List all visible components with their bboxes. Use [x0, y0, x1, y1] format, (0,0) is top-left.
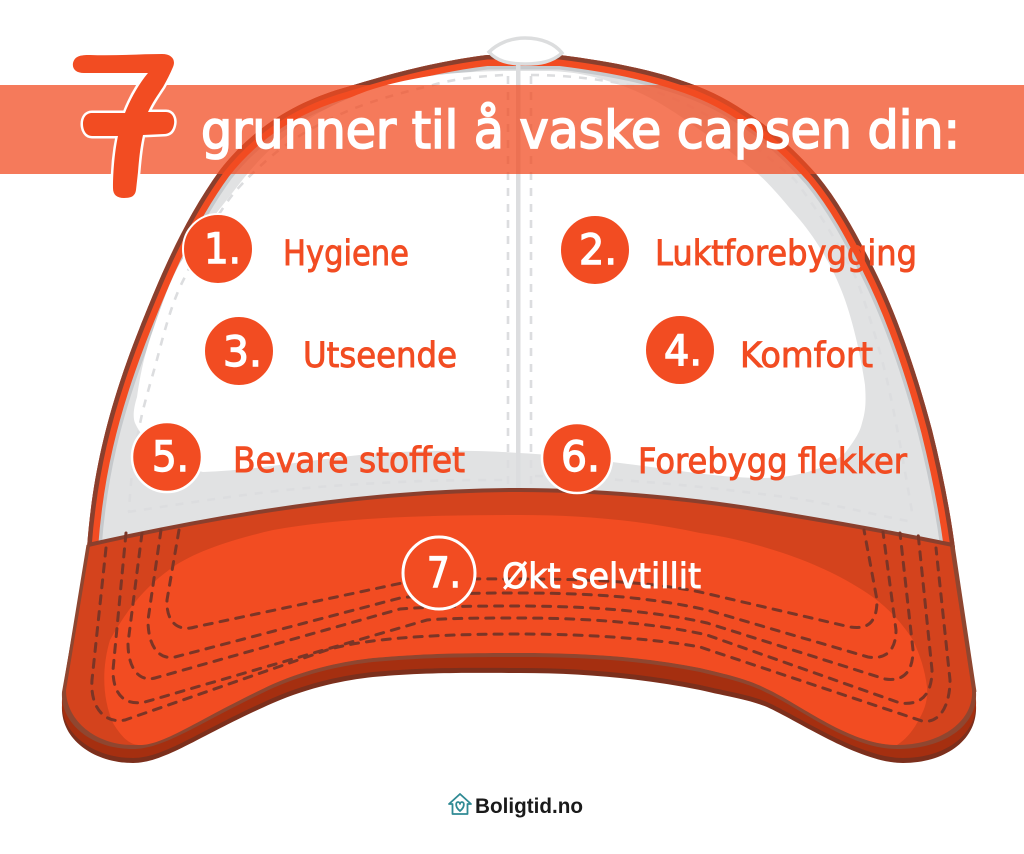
- cap visor: [62, 490, 976, 763]
- reason 6: [542, 423, 908, 493]
- reason 4: Komfort: [740, 336, 873, 376]
- reason 2: [560, 215, 917, 285]
- title: grunner til å vaske capsen din:: [201, 101, 960, 161]
- reason 6: 6.: [561, 432, 600, 481]
- cap crown: [60, 38, 980, 560]
- reason 5: Bevare stoffet: [233, 441, 465, 481]
- visor bright area: [104, 515, 927, 745]
- logo: Boligtid.no: [475, 795, 583, 818]
- reason 6: Forebygg flekker: [638, 442, 908, 482]
- visor face: [66, 490, 972, 745]
- top button: [489, 38, 562, 64]
- reason 3: Utseende: [303, 336, 457, 376]
- reason 3: 3.: [223, 327, 262, 376]
- reason 1: Hygiene: [283, 234, 409, 274]
- reason 4: [645, 315, 873, 385]
- reason 5: [132, 422, 465, 492]
- reason 4: 4.: [664, 326, 702, 375]
- visor side edges: [64, 545, 975, 692]
- centre seam: [516, 62, 520, 492]
- reason 1: [183, 214, 409, 284]
- visor underside: [62, 490, 976, 763]
- visor stitching: [92, 530, 950, 721]
- reason 7: 7.: [427, 548, 461, 597]
- cap illustration: [60, 38, 980, 763]
- reason 2: Luktforebygging: [655, 234, 917, 274]
- reason 7: [403, 537, 701, 609]
- title banner: [0, 85, 1024, 174]
- reason 7: Økt selvtillit: [502, 557, 701, 597]
- icon: house with heart: [449, 794, 471, 814]
- big number seven: [73, 54, 174, 198]
- reason 3: [204, 316, 457, 386]
- reason 1: 1.: [204, 224, 241, 273]
- crown stitching: [128, 75, 913, 522]
- visor top seam: [88, 490, 953, 545]
- reason 5: 5.: [152, 432, 189, 481]
- reason 2: 2.: [579, 225, 617, 274]
- white crown highlight: [134, 71, 866, 478]
